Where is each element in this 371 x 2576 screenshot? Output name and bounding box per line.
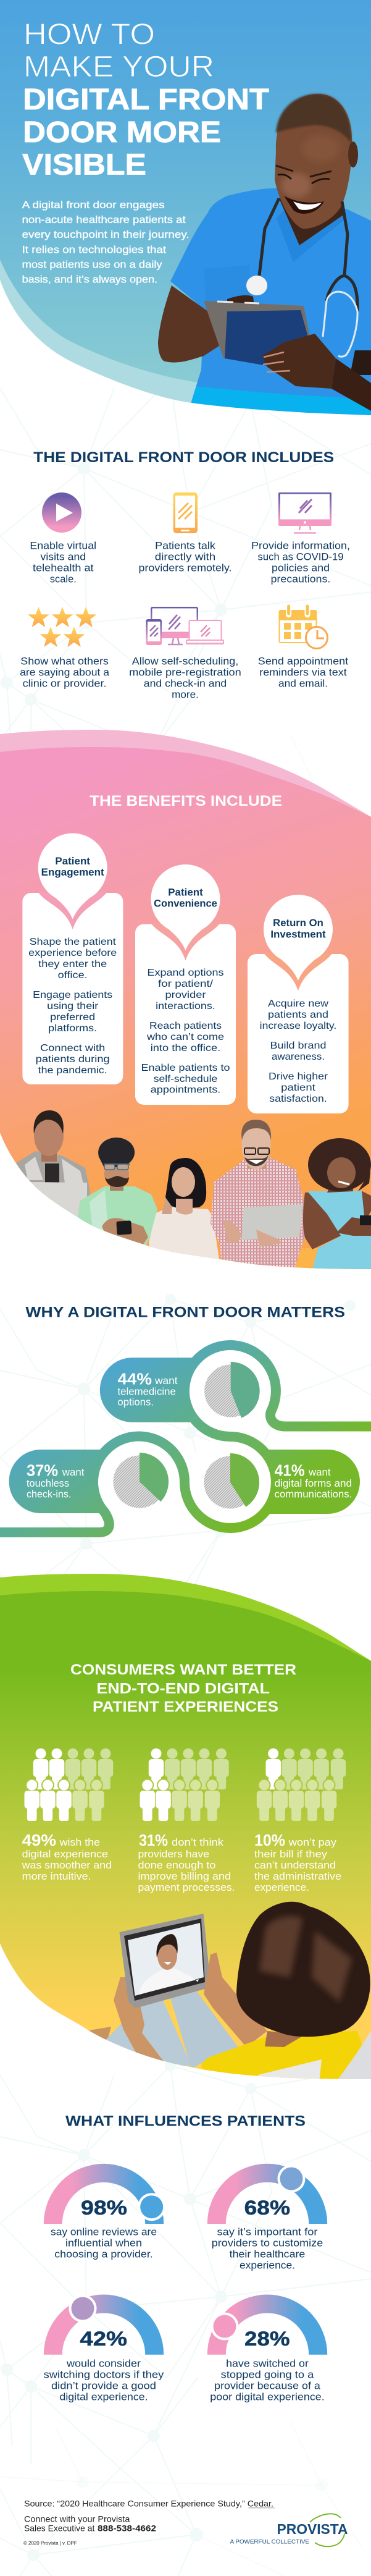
- contact: 888-538-4662: [98, 2523, 156, 2533]
- text block: appointment reminders: [258, 656, 349, 690]
- panel: what influences patients: [44, 2113, 325, 2403]
- card: patient engagement: Engagement: [41, 867, 104, 878]
- text: 98 percent: influential when: [65, 2238, 142, 2249]
- contact: Sales Executive at: [24, 2523, 94, 2533]
- text block: provide information: [251, 540, 350, 585]
- pill backgrounds: [9, 1358, 360, 1514]
- text block: intro: [22, 199, 190, 285]
- card: patient convenience: interactions.: [156, 1001, 215, 1011]
- panel: why a digital front door matters: [0, 1304, 371, 1532]
- text block: intro: basis, and it’s always open.: [22, 274, 157, 285]
- text block: intro: non-acute healthcare patients at: [22, 214, 186, 226]
- pie: 37 percent: [113, 1453, 169, 1508]
- stat: 37 percent: touchless: [27, 1478, 69, 1489]
- card: patient engagement: Patient: [55, 856, 90, 867]
- person: woman with curly hair: [303, 1138, 371, 1270]
- text block: appointment reminders: Send appointment: [258, 656, 349, 667]
- stat: 44 percent: 44%: [117, 1370, 152, 1388]
- text block: intro: It relies on technologies that: [22, 243, 166, 255]
- text block: show what others: are saying about a: [20, 667, 110, 678]
- stat: 31 percent: improve billing and: [138, 1871, 231, 1882]
- text: 68 percent: experience.: [240, 2260, 295, 2271]
- stat: 10 percent: experience.: [254, 1882, 309, 1893]
- card: patient engagement: preferred: [50, 1012, 95, 1023]
- card: patient engagement: they enter the: [38, 959, 107, 969]
- card: patient engagement: Connect with: [40, 1043, 105, 1054]
- text block: enable virtual visits: [30, 540, 96, 585]
- text block: enable virtual visits: visits and: [41, 551, 86, 562]
- card: patient convenience: for patient/: [158, 979, 214, 989]
- card: return on investment: Build brand: [270, 1041, 326, 1051]
- text block: enable virtual visits: telehealth at: [33, 562, 94, 573]
- connector ribbon: [0, 1345, 371, 1532]
- icon: desktop monitor: [278, 492, 331, 533]
- text: 98 percent: [51, 2227, 157, 2260]
- card: return on investment: awareness.: [272, 1052, 325, 1062]
- card: return on investment: Return On: [273, 918, 323, 929]
- source line: Source: “2020 Healthcare Consumer Experience Study,” Cedar.: [24, 2499, 273, 2509]
- panel: hero: [0, 0, 371, 415]
- person: man with turban: [78, 1138, 157, 1246]
- stat: 10 percent: [254, 1831, 341, 1893]
- pictogram: 10 percent: [257, 1749, 346, 1821]
- stat: 49 percent: [22, 1831, 112, 1882]
- stat: 31 percent: payment processes.: [138, 1882, 235, 1893]
- card: patient convenience: Patient: [168, 887, 203, 898]
- text block: self-scheduling: [129, 656, 241, 701]
- card: patient convenience: provider: [165, 990, 206, 1000]
- person: man with laptop: [15, 1110, 90, 1230]
- text block: provide information: policies and: [272, 562, 330, 573]
- contact: Connect with your Provista: [24, 2514, 130, 2524]
- stat: 31 percent: providers have: [138, 1849, 209, 1860]
- stat: 37 percent: check-ins.: [27, 1489, 71, 1500]
- panel: the digital front door includes: [20, 449, 350, 701]
- text: 28 percent: stopped going to a: [221, 2370, 314, 2381]
- stat: 44 percent: [117, 1370, 178, 1408]
- logo: [230, 2514, 348, 2546]
- card: patient convenience: Convenience: [154, 898, 217, 910]
- person: man with glasses and laptop: [211, 1119, 307, 1273]
- gauge: 98 percent: [53, 2173, 165, 2224]
- logo: PROVISTA: [277, 2521, 348, 2537]
- text block: self-scheduling: mobile pre-registration: [129, 667, 241, 678]
- card: patient convenience: self-schedule: [154, 1074, 217, 1084]
- gauge: 28 percent: 28%: [244, 2328, 290, 2350]
- text block: intro: every touchpoint in their journey.: [22, 229, 190, 240]
- stat: 41 percent: communications.: [275, 1489, 352, 1500]
- card: patient engagement: platforms.: [48, 1023, 97, 1034]
- card: patient engagement: using their: [47, 1001, 98, 1011]
- text block: patients talk: [138, 540, 232, 573]
- icon: devices: [146, 607, 224, 645]
- gauge: 98 percent: 98%: [81, 2197, 127, 2219]
- text block: self-scheduling: more.: [172, 690, 199, 701]
- heading: WHAT INFLUENCES PATIENTS: [65, 2113, 306, 2130]
- text: 68 percent: say it’s important for: [217, 2227, 318, 2238]
- stat: 41 percent: 41%: [275, 1461, 305, 1479]
- stat: 37 percent: 37%: [27, 1461, 58, 1479]
- stat: 31 percent: 31%: [139, 1831, 168, 1849]
- heading: WHY A DIGITAL FRONT DOOR MATTERS: [25, 1304, 345, 1321]
- stat: 37 percent: want: [62, 1467, 85, 1478]
- card: return on investment: Drive higher: [269, 1071, 328, 1082]
- text: 28 percent: have switched or: [226, 2359, 309, 2370]
- card: patient engagement: experience before: [28, 948, 117, 958]
- card: return on investment: increase loyalty.: [260, 1021, 336, 1031]
- gauge: 68 percent: 68%: [244, 2197, 290, 2219]
- stat: 44 percent: telemedicine: [117, 1386, 176, 1397]
- text: 42 percent: digital experience.: [59, 2392, 148, 2403]
- heading: CONSUMERS WANT BETTER: [70, 1662, 296, 1678]
- text: 28 percent: poor digital experience.: [210, 2392, 325, 2403]
- text: 68 percent: providers to customize: [212, 2238, 323, 2249]
- text: 28 percent: provider because of a: [214, 2381, 321, 2392]
- title: DIGITAL FRONT: [23, 83, 269, 116]
- text block: show what others: clinic or provider.: [23, 678, 107, 690]
- person: woman on phone: [149, 1158, 220, 1264]
- text block: intro: A digital front door engages: [22, 199, 165, 211]
- card: patient convenience: into the office.: [151, 1043, 220, 1054]
- gauge: 68 percent: [217, 2165, 318, 2224]
- heading: THE DIGITAL FRONT DOOR INCLUDES: [33, 449, 334, 466]
- card: return on investment: satisfaction.: [269, 1094, 327, 1104]
- gauge: 42 percent: 42%: [80, 2328, 127, 2350]
- card: patient engagement: the pandemic.: [38, 1065, 107, 1076]
- stat: 10 percent: can’t understand: [254, 1860, 336, 1871]
- title: VISIBLE: [22, 149, 146, 182]
- text: 98 percent: say online reviews are: [51, 2227, 157, 2238]
- stat: 49 percent: digital experience: [22, 1849, 108, 1860]
- text block: provide information: precautions.: [271, 573, 330, 585]
- card: patient convenience: [135, 864, 236, 1105]
- text block: enable virtual visits: scale.: [50, 573, 77, 585]
- text: 42 percent: switching doctors if they: [44, 2370, 164, 2381]
- stat: 44 percent: options.: [117, 1396, 154, 1408]
- text block: patients talk: directly with: [155, 551, 215, 562]
- photo: nurse with tablet: [158, 94, 371, 415]
- icon: video play: [42, 492, 81, 533]
- stat: 44 percent: want: [154, 1375, 178, 1387]
- title: MAKE YOUR: [23, 51, 214, 83]
- card: return on investment: Investment: [270, 929, 326, 940]
- stat: 10 percent: the administrative: [254, 1871, 341, 1882]
- copyright: © 2020 Provista | v. DPF: [23, 2541, 77, 2546]
- text block: provide information: Provide information,: [251, 540, 350, 551]
- text: 42 percent: [44, 2359, 164, 2403]
- card: patient engagement: [22, 833, 123, 1084]
- stat: 10 percent: 10%: [254, 1831, 285, 1849]
- stat: 10 percent: their bill if they: [254, 1849, 328, 1860]
- heading: THE BENEFITS INCLUDE: [90, 793, 282, 809]
- pie: 44 percent: [204, 1362, 260, 1418]
- card: patient convenience: appointments.: [151, 1085, 220, 1095]
- card: return on investment: patient: [281, 1083, 316, 1093]
- stat: 10 percent: won’t pay: [288, 1837, 337, 1848]
- stat: 41 percent: digital forms and: [275, 1478, 352, 1489]
- text block: enable virtual visits: Enable virtual: [30, 540, 96, 551]
- text block: patients talk: providers remotely.: [138, 562, 232, 573]
- title: [22, 18, 269, 182]
- icon: smartphone: [173, 492, 198, 533]
- text: 42 percent: would consider: [66, 2359, 141, 2370]
- panel: consumers want better experiences: [0, 1574, 371, 2082]
- icon: five stars: [28, 607, 96, 647]
- photo: woman on video visit: [85, 1902, 371, 2082]
- text: 98 percent: choosing a provider.: [54, 2249, 153, 2260]
- gauge: 28 percent: [211, 2304, 318, 2355]
- card: return on investment: [248, 895, 349, 1113]
- text block: patients talk: Patients talk: [155, 540, 216, 551]
- stat: 31 percent: [138, 1831, 235, 1893]
- card: patient engagement: office.: [58, 970, 88, 981]
- text block: self-scheduling: Allow self-scheduling,: [132, 656, 238, 667]
- stat: 31 percent: done enough to: [138, 1860, 216, 1871]
- text: 68 percent: their healthcare: [230, 2249, 305, 2260]
- text: 42 percent: didn’t provide a good: [51, 2381, 156, 2392]
- heading: [70, 1662, 296, 1715]
- title: HOW TO: [23, 18, 155, 51]
- card: patient engagement: patients during: [36, 1054, 110, 1065]
- pictogram: 49 percent: [25, 1749, 113, 1821]
- card: return on investment: patients and: [268, 1010, 328, 1020]
- stat: 37 percent: [27, 1461, 85, 1500]
- contact: [24, 2514, 156, 2533]
- logo: A POWERFUL COLLECTIVE: [230, 2539, 309, 2545]
- photo: five people using devices: [15, 1110, 371, 1273]
- stat: 31 percent: don’t think: [172, 1837, 224, 1848]
- text block: show what others: Show what others: [20, 656, 109, 667]
- card: patient convenience: Enable patients to: [141, 1063, 230, 1073]
- panel: footer: [23, 2499, 348, 2546]
- card: return on investment: Acquire new: [268, 999, 329, 1009]
- title: DOOR MORE: [23, 116, 221, 149]
- heading: PATIENT EXPERIENCES: [93, 1699, 278, 1715]
- icon: calendar and clock: [279, 606, 327, 649]
- panel: the benefits include: [0, 730, 371, 1273]
- gauge: 42 percent: [53, 2295, 154, 2355]
- card: patient convenience: Reach patients: [149, 1021, 222, 1031]
- stat: 49 percent: more intuitive.: [22, 1871, 91, 1882]
- text block: provide information: such as COVID-19: [258, 551, 343, 562]
- card: patient convenience: Expand options: [147, 968, 224, 978]
- text: 68 percent: [212, 2227, 323, 2271]
- text block: intro: most patients use on a daily: [22, 258, 162, 271]
- card: patient engagement: Shape the patient: [30, 937, 116, 947]
- stat: 49 percent: 49%: [22, 1831, 56, 1849]
- pictogram: 31 percent: [140, 1749, 229, 1821]
- text block: appointment reminders: and email.: [278, 678, 328, 690]
- stat: 49 percent: was smoother and: [22, 1860, 112, 1871]
- heading: END-TO-END DIGITAL: [96, 1681, 270, 1697]
- text block: show what others: [20, 656, 110, 690]
- stat: 41 percent: [275, 1461, 352, 1500]
- card: patient engagement: Engage patients: [33, 990, 112, 1000]
- stat: 49 percent: wish the: [59, 1837, 100, 1848]
- text block: appointment reminders: reminders via text: [259, 667, 347, 678]
- card: patient convenience: who can’t come: [146, 1032, 224, 1042]
- stat: 41 percent: want: [308, 1467, 331, 1478]
- pie: 41 percent: [204, 1453, 259, 1509]
- text block: self-scheduling: and check-in and: [144, 678, 227, 690]
- text: 28 percent: [210, 2359, 325, 2403]
